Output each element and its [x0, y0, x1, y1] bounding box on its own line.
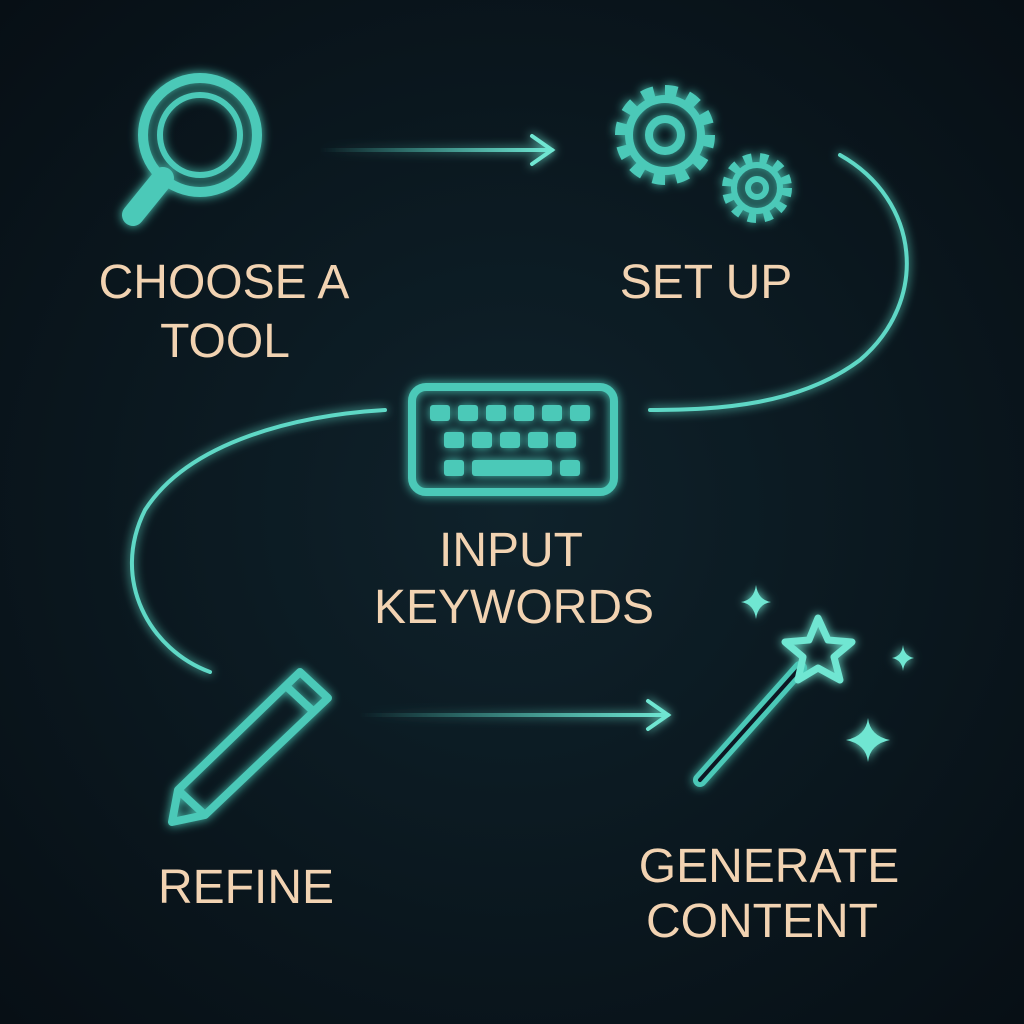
arrow: to generate	[360, 701, 668, 729]
icon: gears	[621, 91, 787, 218]
heading: choose a tool	[99, 256, 349, 368]
heading: set up: SET UP	[620, 256, 792, 309]
heading: choose a tool: CHOOSE A	[99, 256, 349, 309]
heading: generate content: GENERATE	[639, 840, 899, 893]
heading: choose a tool: TOOL	[160, 315, 290, 368]
arrow: to set up	[320, 136, 552, 164]
heading: refine: REFINE	[158, 861, 334, 914]
arrow: curve right	[650, 155, 907, 410]
icon: magic wand	[700, 585, 914, 780]
heading: generate content: CONTENT	[646, 895, 878, 948]
icon: pencil	[172, 672, 328, 822]
heading: input keywords	[374, 524, 654, 634]
heading: input keywords: KEYWORDS	[374, 581, 654, 634]
icon: keyboard	[412, 387, 614, 492]
heading: input keywords: INPUT	[439, 524, 583, 577]
arrow: curve left	[132, 410, 385, 672]
heading: generate content	[639, 840, 899, 948]
icon: magnifier	[133, 78, 257, 215]
